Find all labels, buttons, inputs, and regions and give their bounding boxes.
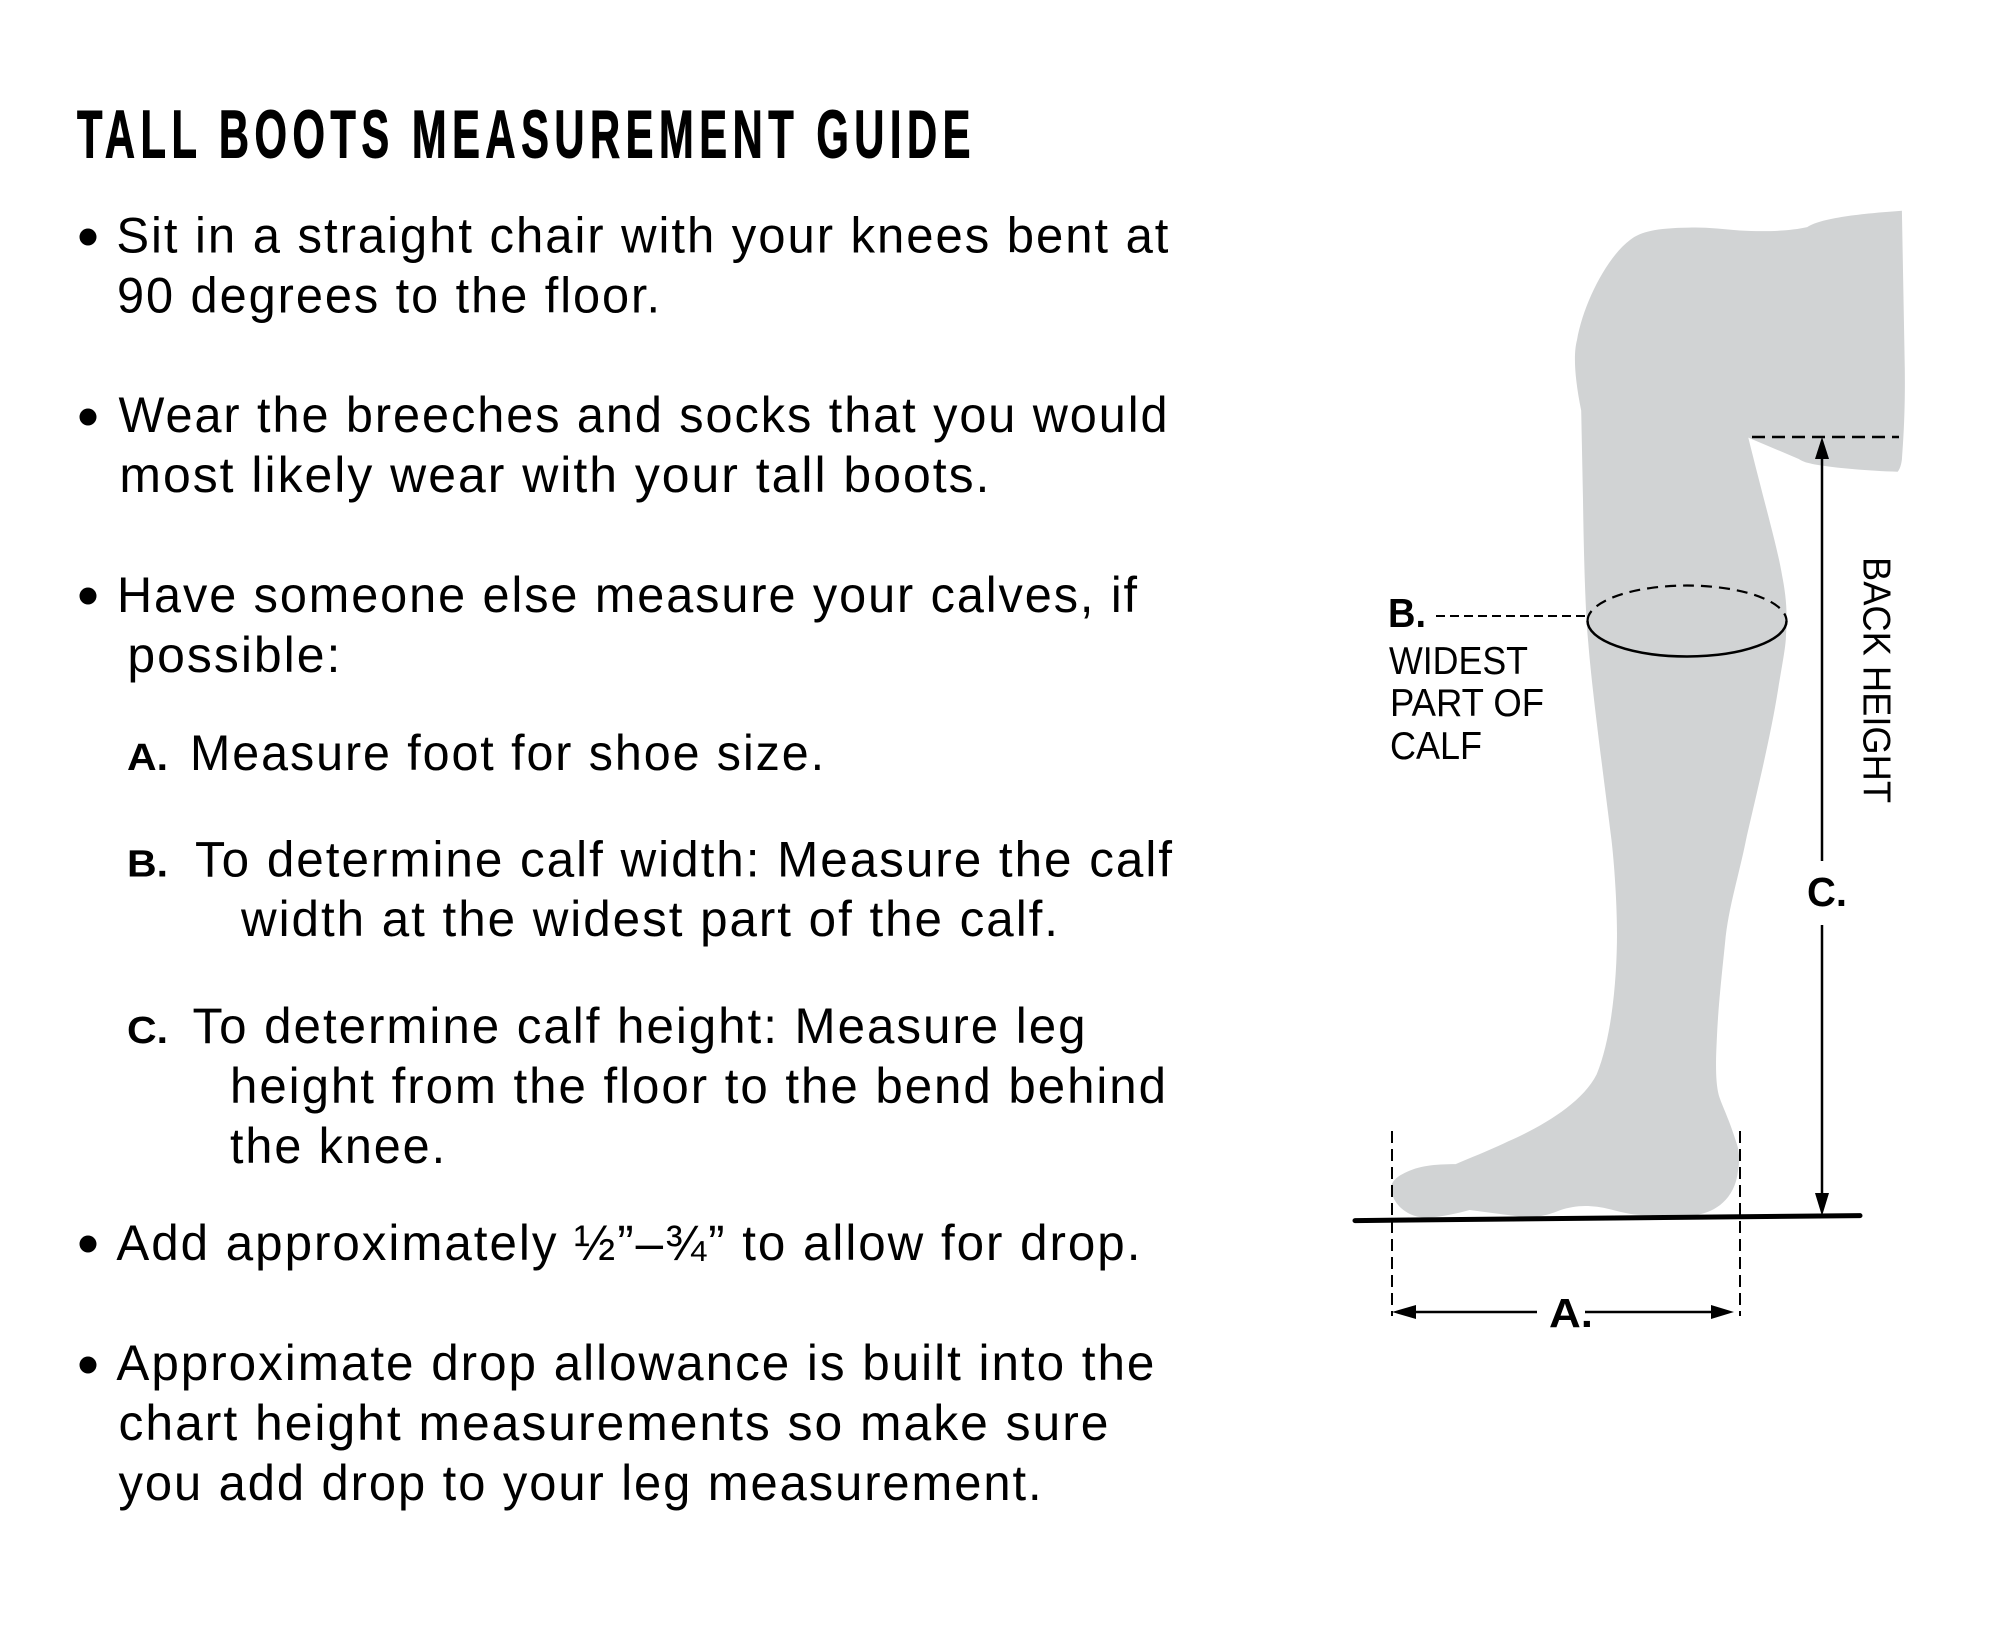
bullet: allow for drop: Add approximately ½”–¾” to allow for drop. — [116, 1215, 1142, 1271]
bullet: breeches and socks: most likely wear with your tall boots. — [119, 447, 991, 503]
step B — [127, 832, 1174, 947]
bullet: have someone measure: possible: — [127, 627, 342, 683]
step C: the knee. — [230, 1118, 447, 1174]
knee bend dashed line — [1752, 436, 1899, 438]
foot length guides — [1392, 1131, 1740, 1316]
calf measurement ellipse — [1588, 586, 1786, 656]
label widest part of calf: PART OF — [1390, 682, 1544, 725]
bullet: drop allowance — [80, 1335, 1156, 1511]
step B: width at the widest part of the calf. — [240, 891, 1060, 947]
bullet: sit in a chair: Sit in a straight chair with your knees bent at — [116, 208, 1170, 264]
step C: height from the floor to the bend behind — [230, 1058, 1168, 1114]
label widest part of calf: CALF — [1390, 725, 1482, 768]
bullet: breeches and socks: Wear the breeches and socks that you would — [118, 387, 1170, 443]
text block: instructions — [80, 208, 1174, 1511]
step C — [127, 998, 1168, 1174]
bullet: sit in a chair — [80, 208, 1170, 324]
arrow C: back height — [1815, 437, 1829, 1216]
leg silhouette — [1391, 211, 1905, 1218]
step C: C. — [127, 1010, 168, 1052]
bullet: drop allowance: chart height measurements so make sure — [118, 1395, 1110, 1451]
label widest part of calf — [1389, 640, 1544, 768]
label A: A. — [1549, 1290, 1593, 1336]
bullet: have someone measure — [80, 567, 1139, 683]
bullet: drop allowance: you add drop to your leg measurement. — [118, 1455, 1044, 1511]
bullet: sit in a chair: 90 degrees to the floor. — [117, 268, 662, 324]
arrow A: foot length — [1392, 1305, 1734, 1319]
label back height: BACK HEIGHT — [1854, 557, 1898, 803]
diagram: leg measurement — [1355, 211, 1905, 1336]
step B: B. — [127, 844, 168, 886]
label widest part of calf: WIDEST — [1389, 640, 1528, 683]
step B: To determine calf width: Measure the calf — [195, 832, 1174, 888]
step A: A. — [127, 737, 168, 779]
bullet: have someone measure: Have someone else measure your calves, if — [117, 567, 1139, 623]
label B with leader: B. — [1388, 590, 1426, 636]
title: TALL BOOTS MEASUREMENT GUIDE — [77, 96, 976, 172]
step C: To determine calf height: Measure leg — [192, 998, 1088, 1054]
floor line — [1355, 1216, 1860, 1221]
step A: Measure foot for shoe size. — [190, 725, 826, 781]
bullet: breeches and socks — [80, 387, 1170, 503]
label C: C. — [1807, 869, 1847, 915]
bullet: drop allowance: Approximate drop allowance is built into the — [116, 1335, 1156, 1391]
